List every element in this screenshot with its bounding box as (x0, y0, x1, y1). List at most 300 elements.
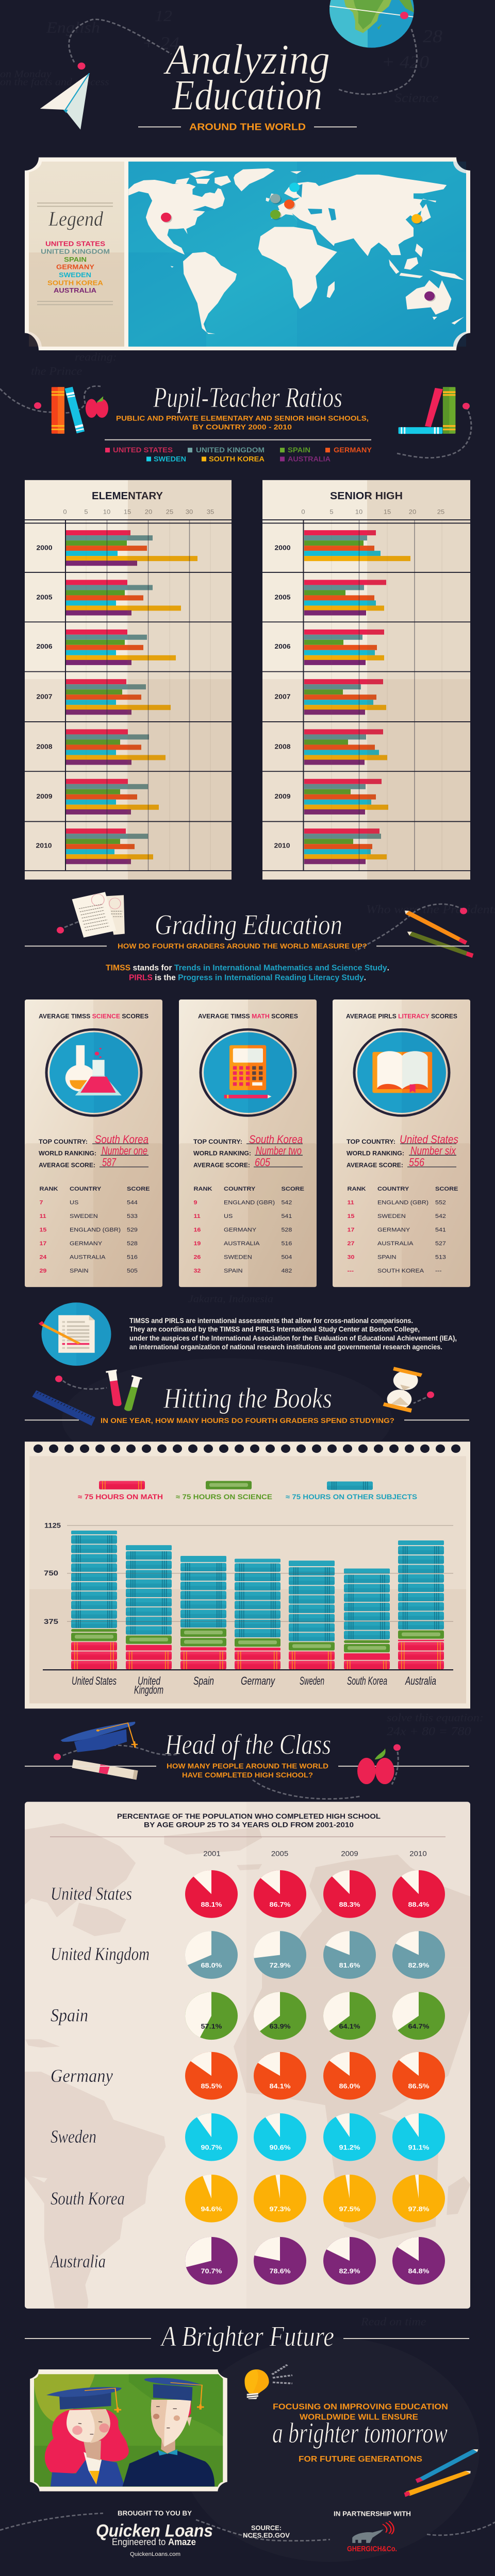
row: Sweden: 90.6% (269, 2143, 291, 2151)
color legend: AUSTRALIA (288, 455, 331, 463)
ranking table: 542 (435, 1213, 446, 1219)
panel: world map with legend (25, 157, 470, 350)
logo: Ghergich elephant (352, 2521, 394, 2543)
map pins (161, 183, 436, 301)
ranking table: ENGLAND (GBR) (70, 1226, 121, 1233)
heading: head of the class: Head of the Class (164, 1728, 331, 1760)
row: United Kingdom: 72.9% (269, 1961, 291, 1969)
year labels: 2006 (274, 643, 291, 650)
year headings: 2005 (271, 1850, 288, 1858)
legend: book units (78, 1481, 417, 1501)
color legend: SPAIN (288, 447, 310, 454)
row: South Korea: 97.8% (408, 2205, 430, 2213)
panel: elementary chart (25, 480, 232, 879)
chalkboard background: Read on time (360, 2316, 426, 2328)
country labels: United States (72, 1674, 117, 1687)
bars 2007 (66, 679, 171, 715)
year labels: 2007 (274, 693, 291, 700)
axis labels: 5 (329, 509, 334, 515)
row: United Kingdom (51, 1931, 445, 1979)
ranking table: 528 (127, 1240, 138, 1247)
stacked books: Spain (180, 1556, 226, 1669)
ranking table: 513 (435, 1253, 446, 1260)
handwritten answers (400, 1133, 458, 1168)
axis labels: 25 (166, 509, 173, 515)
year headings (203, 1850, 427, 1858)
section heading: hitting the books (25, 1367, 469, 1426)
y axis: 1125 (44, 1522, 61, 1530)
panel: hours chart notebook (25, 1442, 470, 1708)
legend panel: UNITED STATES (45, 240, 105, 247)
top country fields: AVERAGE SCORE: (346, 1162, 403, 1168)
row: Spain (51, 1992, 445, 2040)
heading: elementary: ELEMENTARY (92, 490, 163, 502)
row: Spain: Spain (51, 2005, 88, 2026)
in partnership with: IN PARTNERSHIP WITH (334, 2510, 411, 2517)
icon: calculator in circle (201, 1029, 295, 1115)
ranking table: COUNTRY (70, 1185, 101, 1192)
ranking table: 30 (348, 1253, 355, 1260)
notebook holes (34, 1445, 460, 1453)
year labels: 2006 (36, 643, 53, 650)
bars 2009 (304, 779, 388, 815)
row: Spain: 64.1% (339, 2022, 360, 2030)
row: United States (51, 1870, 445, 1918)
row: South Korea: 94.6% (201, 2205, 222, 2213)
chalkboard background: reading: (75, 351, 117, 363)
title: Analyzing (163, 36, 330, 84)
year labels: 2000 (274, 544, 291, 551)
country labels: Germany (241, 1674, 275, 1687)
axis labels: 5 (84, 509, 88, 515)
axis labels: 10 (355, 509, 362, 515)
y axis: 375 (44, 1618, 58, 1626)
ranking table: RANK (348, 1185, 366, 1192)
ranking table: 529 (127, 1226, 138, 1233)
subtitle: around the world: AROUND THE WORLD (189, 123, 306, 132)
text: TIMSS and PIRLS definitions: TIMSS stands for Trends in International Mathematics and Science Study. (106, 963, 389, 972)
row: Sweden: 91.1% (408, 2143, 430, 2151)
dashed flight path (69, 20, 417, 94)
year labels: 2008 (36, 743, 53, 750)
logo: Quicken Loans: Quicken Loans (96, 2520, 213, 2540)
chalkboard background: on Monday (0, 68, 52, 80)
top country fields (346, 1139, 404, 1168)
row: United States: 88.4% (408, 1901, 430, 1908)
chalkboard background: Science (394, 90, 439, 105)
legend panel: UNITED KINGDOM (41, 248, 110, 256)
marker dot near plane (77, 62, 86, 70)
ranking table: RANK (39, 1185, 58, 1192)
handwritten answers (92, 1133, 148, 1168)
handwritten answers: United States (400, 1133, 458, 1146)
bars 2008 (66, 729, 166, 765)
chalkboard background: 28 (423, 26, 442, 46)
subtitle (116, 415, 369, 431)
ranking table: 9 (194, 1199, 197, 1206)
text: about TIMSS and PIRLS: They are coordinated by the TIMSS and PIRLS International Study Center at Boston College, (129, 1326, 420, 1333)
icon: pencils (405, 910, 473, 958)
axis labels: 0 (301, 509, 305, 515)
ranking table: 15 (348, 1213, 355, 1219)
ranking table: 516 (282, 1240, 292, 1247)
year labels (36, 544, 53, 849)
closing message: FOR FUTURE GENERATIONS (299, 2455, 422, 2464)
row: Germany: 86.5% (408, 2082, 430, 2090)
chalkboard background: solve this equation: (387, 1711, 484, 1724)
axis labels: 20 (409, 509, 416, 515)
footer (0, 2510, 495, 2557)
ranking table: 552 (435, 1199, 446, 1206)
year labels: 2010 (274, 842, 290, 849)
green backdrop (34, 2374, 223, 2487)
chart grid and paper folds (262, 480, 470, 879)
row: Sweden (51, 2113, 445, 2161)
card title: AVERAGE PIRLS LITERACY SCORES (346, 1013, 457, 1020)
ranking table: 504 (282, 1253, 292, 1260)
row: Germany: 84.1% (269, 2082, 291, 2090)
ranking table: 482 (282, 1267, 292, 1274)
subtitle: IN ONE YEAR, HOW MANY HOURS DO FOURTH GRADERS SPEND STUDYING? (101, 1417, 394, 1425)
subtitle: HOW MANY PEOPLE AROUND THE WORLD (167, 1762, 328, 1771)
top country fields: TOP COUNTRY: (346, 1139, 395, 1145)
stacked books: Sweden (289, 1561, 335, 1669)
color legend: UNITED STATES (113, 447, 173, 454)
legend: book units: ≈ 75 HOURS ON MATH (78, 1494, 163, 1501)
ranking table: 527 (435, 1240, 446, 1247)
ranking table: 11 (194, 1213, 201, 1219)
handwritten answers: 587 (102, 1156, 117, 1168)
panel title (117, 1813, 381, 1829)
row: South Korea: South Korea (51, 2189, 125, 2209)
handwritten answers: Number six (410, 1144, 456, 1157)
country labels: Spain (193, 1674, 214, 1687)
ranking table: GERMANY (224, 1226, 256, 1233)
row: South Korea: 97.5% (339, 2205, 360, 2213)
card title: AVERAGE TIMSS SCIENCE SCORES (39, 1013, 148, 1020)
ranking table: GERMANY (377, 1226, 410, 1233)
top country fields: WORLD RANKING: (346, 1150, 404, 1157)
ranking table: --- (348, 1267, 354, 1274)
row: Australia: 70.7% (201, 2267, 222, 2275)
panel: math scores (179, 999, 317, 1287)
y axis: 750 (44, 1570, 58, 1578)
section heading: head of the class (25, 1722, 469, 1799)
ranking table: SWEDEN (70, 1213, 98, 1219)
ranking table: ENGLAND (GBR) (377, 1199, 428, 1206)
axis labels: 10 (103, 509, 110, 515)
axis labels (301, 509, 444, 515)
ranking table: 11 (39, 1213, 46, 1219)
heading: pupil-teacher ratios: Pupil-Teacher Ratios (153, 381, 342, 413)
row: United Kingdom: 81.6% (339, 1961, 360, 1969)
ranking table: RANK (194, 1185, 212, 1192)
subtitle (25, 1762, 469, 1780)
row: South Korea: 97.3% (269, 2205, 291, 2213)
top country fields: TOP COUNTRY: (193, 1139, 242, 1145)
handwritten answers: Number two (256, 1144, 302, 1157)
chalkboard background: on the facts and process (0, 76, 109, 88)
ranking table: 27 (348, 1240, 355, 1247)
closing message (272, 2402, 448, 2464)
year labels: 2008 (274, 743, 291, 750)
row: Australia: 84.8% (408, 2267, 430, 2275)
chart grid and paper folds (25, 480, 232, 879)
axis labels: 20 (145, 509, 152, 515)
color legend: UNITED KINGDOM (196, 447, 265, 454)
row: United States: United States (51, 1884, 132, 1904)
handwritten answers: 605 (255, 1156, 270, 1168)
in partnership with: GHERGICH&Co. (347, 2545, 397, 2553)
legend panel: GERMANY (56, 263, 94, 271)
stacked books: United States (71, 1531, 117, 1669)
top country fields (193, 1139, 251, 1168)
chalkboard background: the Prince (31, 365, 82, 377)
legend panel: Legend (48, 208, 104, 231)
icon: hourglass (383, 1367, 422, 1413)
row: United Kingdom: United Kingdom (51, 1944, 150, 1964)
row: Spain: 64.7% (408, 2022, 430, 2030)
ranking table: 542 (282, 1199, 292, 1206)
country labels: South Korea (347, 1674, 387, 1687)
chalkboard background: 24x + 80 = 780 (387, 1725, 471, 1738)
bars 2005 (304, 580, 386, 616)
row: United States: 86.7% (269, 1901, 291, 1908)
ranking table: 17 (348, 1226, 355, 1233)
logo: Quicken Loans (96, 2520, 213, 2548)
section marker dots (34, 402, 470, 410)
section heading: pupil-teacher ratios (0, 381, 471, 463)
row: United States: 88.1% (201, 1901, 222, 1908)
boy cap (144, 2378, 204, 2410)
brought to you by (96, 2510, 213, 2557)
legend panel: SPAIN (64, 256, 87, 263)
legend panel (29, 162, 124, 347)
map frame (25, 157, 470, 350)
boy (123, 2400, 214, 2486)
ranking table: 15 (39, 1226, 47, 1233)
color legend: SWEDEN (154, 455, 186, 463)
closing message: FOCUSING ON IMPROVING EDUCATION (273, 2402, 448, 2411)
ranking table: SPAIN (70, 1267, 89, 1274)
icon: globe (329, 0, 414, 48)
handwritten answers: Number one (102, 1144, 147, 1157)
stacked books: United Kingdom (126, 1545, 172, 1669)
ranking table (348, 1185, 458, 1274)
row: Germany (51, 2052, 445, 2099)
top country fields: WORLD RANKING: (39, 1150, 96, 1157)
bars 2006 (66, 630, 176, 665)
row: Sweden: 91.2% (339, 2143, 360, 2151)
source (243, 2524, 290, 2539)
year labels: 2005 (36, 594, 53, 601)
year labels: 2007 (36, 693, 53, 700)
axis labels: 30 (186, 509, 193, 515)
logo: Quicken Loans: Engineered to Amaze (112, 2537, 196, 2548)
ranking table: SWEDEN (224, 1253, 252, 1260)
country labels: Kingdom (134, 1683, 163, 1696)
ranking table: SOUTH KOREA (377, 1267, 424, 1274)
title: Education (171, 72, 322, 120)
top country fields (39, 1139, 96, 1168)
subtitle: BY COUNTRY 2000 - 2010 (192, 423, 292, 431)
legend: book units: ≈ 75 HOURS ON OTHER SUBJECTS (286, 1494, 417, 1501)
ranking table: 528 (282, 1226, 292, 1233)
world map (128, 162, 466, 347)
ranking table: US (224, 1213, 233, 1219)
ranking table: 533 (127, 1213, 138, 1219)
row: Spain: 63.9% (269, 2022, 291, 2030)
ranking table: 7 (39, 1199, 43, 1206)
bars 2010 (66, 828, 153, 864)
year labels (274, 544, 291, 849)
row: United States: 88.3% (339, 1901, 360, 1908)
row: Australia (50, 2237, 445, 2285)
axis labels (63, 509, 214, 515)
row: Sweden: Sweden (51, 2127, 96, 2147)
stacked books: Germany (235, 1558, 280, 1669)
icon: test tubes (106, 1369, 142, 1411)
text: about TIMSS and PIRLS (129, 1317, 457, 1351)
year headings: 2009 (341, 1850, 358, 1858)
panel title: PERCENTAGE OF THE POPULATION WHO COMPLETED HIGH SCHOOL (117, 1813, 381, 1821)
girl cap (46, 2387, 122, 2413)
chalkboard background: Jakarta, Indonesia (188, 1293, 273, 1304)
icon: books and apple left (52, 387, 108, 434)
handwritten answers: 556 (409, 1156, 424, 1168)
closing message: WORLDWIDE WILL ENSURE (300, 2413, 418, 2421)
axis labels: 0 (63, 509, 67, 515)
country labels (72, 1674, 436, 1696)
bars 2006 (304, 630, 384, 665)
ranking table: GERMANY (70, 1240, 102, 1247)
ranking table: SWEDEN (377, 1213, 406, 1219)
ranking table: 516 (127, 1253, 138, 1260)
ranking table: COUNTRY (224, 1185, 255, 1192)
color legend (105, 447, 372, 463)
ranking table: 505 (127, 1267, 138, 1274)
ranking table: AUSTRALIA (70, 1253, 105, 1260)
ranking table: AUSTRALIA (224, 1240, 259, 1247)
source: NCES.ED.GOV (243, 2532, 290, 2539)
illustration: graduates photo (30, 2369, 227, 2492)
ranking table: AUSTRALIA (377, 1240, 413, 1247)
year labels: 2005 (274, 594, 291, 601)
top country fields: AVERAGE SCORE: (39, 1162, 95, 1168)
color legend: GERMANY (334, 447, 372, 454)
year labels: 2010 (36, 842, 52, 849)
ranking table: 544 (127, 1199, 138, 1206)
icon: diploma scroll (72, 1759, 138, 1780)
top country fields: AVERAGE SCORE: (193, 1162, 250, 1168)
bars 2007 (304, 679, 386, 715)
chalkboard background: English (46, 19, 100, 37)
panel: science scores (25, 999, 162, 1287)
ranking table: ENGLAND (GBR) (224, 1199, 275, 1206)
axis labels: 25 (437, 509, 444, 515)
row: Australia: 82.9% (339, 2267, 360, 2275)
legend: book units: ≈ 75 HOURS ON SCIENCE (176, 1494, 272, 1501)
chart axis lines (43, 1526, 453, 1670)
card title: AVERAGE TIMSS MATH SCORES (198, 1013, 298, 1020)
bars 2009 (66, 779, 159, 815)
chalkboard background: Who were the Presidents (366, 903, 495, 916)
row: Germany: 86.0% (339, 2082, 360, 2090)
text: TIMSS and PIRLS definitions (106, 963, 389, 982)
text: TIMSS and PIRLS definitions: PIRLS is the Progress in International Reading Literacy Study. (129, 973, 366, 982)
ranking table: US (70, 1199, 78, 1206)
bars 2008 (304, 729, 387, 765)
ranking table: 17 (39, 1240, 47, 1247)
icon: paper airplane (40, 73, 89, 130)
row: United Kingdom: 82.9% (408, 1961, 430, 1969)
top country fields: WORLD RANKING: (193, 1150, 251, 1157)
ranking table: --- (435, 1267, 442, 1274)
icon: light bulb (244, 2365, 292, 2399)
marker dots (57, 908, 467, 934)
row: Australia: 78.6% (269, 2267, 291, 2275)
legend panel: SWEDEN (59, 272, 91, 279)
handwritten answers (246, 1133, 303, 1168)
panel: senior high chart (262, 480, 470, 879)
header: title area (40, 0, 417, 132)
subtitle: HOW DO FOURTH GRADERS AROUND THE WORLD MEASURE UP? (118, 942, 367, 951)
legend panel: SOUTH KOREA (47, 279, 103, 286)
icon: graduation cap (61, 1722, 138, 1752)
bars 2000 (304, 530, 410, 561)
row: Australia: Australia (50, 2251, 106, 2272)
marker dots (55, 1376, 434, 1398)
ranking table: 16 (194, 1226, 201, 1233)
handwritten answers: South Korea (95, 1133, 148, 1146)
country labels: Australia (405, 1674, 436, 1687)
axis labels: 35 (207, 509, 214, 515)
axis labels: 15 (384, 509, 391, 515)
chalkboard background: + 420 (382, 52, 429, 72)
row: South Korea (51, 2175, 445, 2223)
ranking table: 26 (194, 1253, 201, 1260)
panel: literacy scores (333, 999, 470, 1287)
row: Germany: Germany (51, 2066, 113, 2086)
subtitle: HAVE COMPLETED HIGH SCHOOL? (182, 1772, 313, 1780)
ranking table: COUNTRY (377, 1185, 409, 1192)
ranking table: 24 (39, 1253, 47, 1260)
background world map (25, 1802, 470, 2323)
icon: books right (399, 387, 455, 434)
year headings: 2001 (203, 1850, 221, 1858)
legend panel: AUSTRALIA (54, 287, 96, 294)
heading: hitting the books: Hitting the Books (163, 1382, 332, 1414)
bars 2010 (304, 828, 387, 864)
icon: ruler (32, 1390, 95, 1426)
chalkboard background: 12 (155, 7, 172, 25)
panel: high school completion pies (25, 1802, 470, 2323)
color legend: SOUTH KOREA (209, 455, 265, 463)
chalkboard background: + 24 (142, 33, 179, 53)
ranking table: SCORE (435, 1185, 458, 1192)
ranking table: 19 (194, 1240, 201, 1247)
text: about TIMSS and PIRLS: TIMSS and PIRLS are international assessments that allow for cross-national comparisons. (129, 1317, 413, 1325)
ranking table (194, 1185, 304, 1274)
handwritten answers: South Korea (249, 1133, 303, 1146)
ranking table: SCORE (127, 1185, 150, 1192)
marker dots (54, 1744, 401, 1760)
source: SOURCE: (251, 2524, 282, 2532)
row: Sweden: 90.7% (201, 2143, 222, 2151)
ranking table: 541 (282, 1213, 292, 1219)
ranking table: SCORE (282, 1185, 304, 1192)
ranking table: 541 (435, 1226, 446, 1233)
